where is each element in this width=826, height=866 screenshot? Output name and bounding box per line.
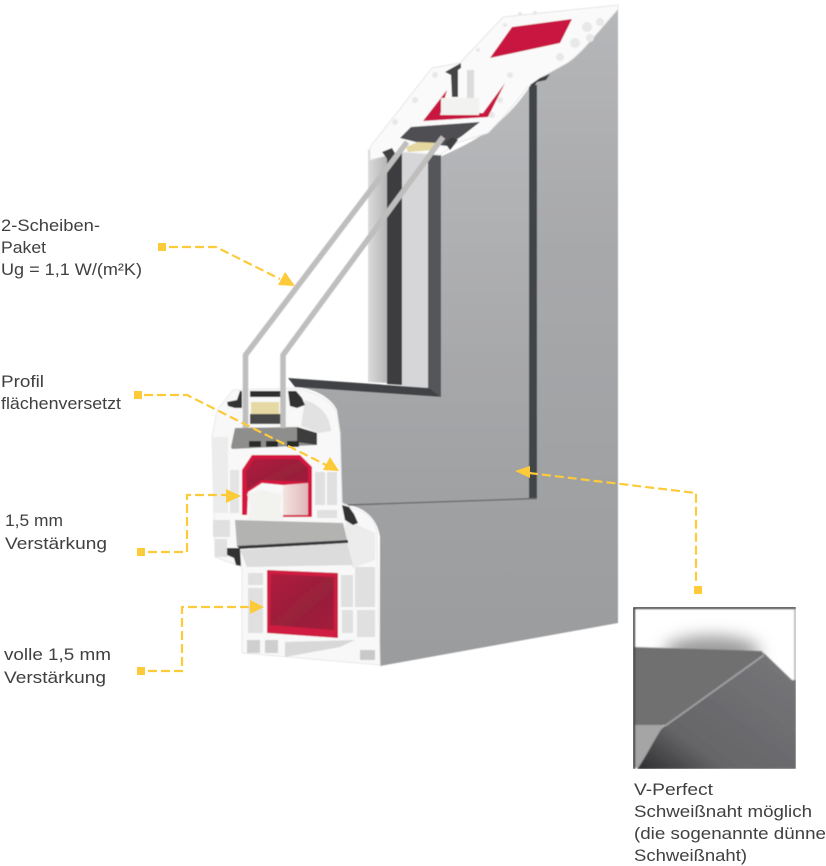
inset photo: V-Perfect weld detail [633, 607, 796, 769]
callout: volle 1,5 mm Verstärkung label [4, 645, 111, 687]
inner profile white [247, 490, 284, 520]
upper reinforcement red [242, 455, 312, 520]
callout: Profil flächenversetzt label [1, 372, 121, 413]
inset left upper face [635, 647, 764, 725]
arrow: V-Perfect weld seam [515, 466, 702, 594]
callout: Profil flächenversetzt label: flächenversetzt [1, 394, 121, 413]
top profile section [370, 5, 618, 160]
outer frame grey face [348, 7, 618, 666]
lower reinforcement red [267, 570, 338, 638]
caption: V-Perfect: Schweißnaht) [634, 846, 747, 865]
callout: 2-Scheiben-Paket label: 2-Scheiben- [1, 216, 100, 235]
callout: volle 1,5 mm Verstärkung label: volle 1,5 mm [4, 645, 111, 664]
inset silver corner [635, 725, 664, 768]
top gasket [445, 63, 461, 97]
inset border [634, 608, 796, 769]
lower cross-section white body [212, 388, 380, 665]
arrow: 2-Scheiben-Paket [158, 243, 295, 286]
sash-frame seam [348, 498, 537, 505]
top dark seal [400, 122, 480, 146]
sash grey face [296, 88, 529, 505]
arrow: 1,5 mm Verstärkung [137, 489, 241, 556]
insulating spacer [251, 402, 279, 414]
caption: V-Perfect: V-Perfect [634, 780, 713, 799]
callout: 1,5 mm Verstärkung label [5, 511, 107, 553]
glass gaskets [227, 391, 242, 408]
sash bulb shading [301, 400, 331, 433]
top spacer [406, 142, 440, 152]
dark gasket vertical band [529, 85, 537, 499]
arrow: Profil flächenversetzt [134, 391, 339, 471]
caption: V-Perfect: Schweißnaht möglich [634, 802, 812, 821]
top cells [392, 11, 604, 125]
inset lower right face [637, 653, 796, 769]
callout: 2-Scheiben-Paket label: Paket [1, 238, 46, 257]
top reinforcement red [490, 19, 572, 58]
glazing bead strips [288, 125, 441, 397]
inset shadow [664, 636, 760, 668]
callout: 2-Scheiben-Paket label [1, 216, 142, 279]
window profile cross-section illustration [212, 5, 618, 666]
upper sash core [227, 391, 317, 449]
double glazing panes [246, 137, 443, 428]
callout: 2-Scheiben-Paket label: Ug = 1,1 W/(m²K) [1, 260, 142, 279]
callout: 1,5 mm Verstärkung label: 1,5 mm [5, 511, 63, 530]
callout: 1,5 mm Verstärkung label: Verstärkung [5, 534, 107, 553]
steel-grey insert and seal [227, 505, 358, 567]
arrow: volle 1,5 mm Verstärkung [137, 600, 264, 675]
callout: volle 1,5 mm Verstärkung label: Verstärkung [4, 668, 106, 687]
caption: V-Perfect [634, 780, 826, 865]
chamber cells [213, 437, 375, 660]
callout: Profil flächenversetzt label: Profil [1, 372, 44, 391]
caption: V-Perfect: (die sogenannte dünne [634, 824, 826, 843]
inset weld seam [665, 655, 764, 726]
